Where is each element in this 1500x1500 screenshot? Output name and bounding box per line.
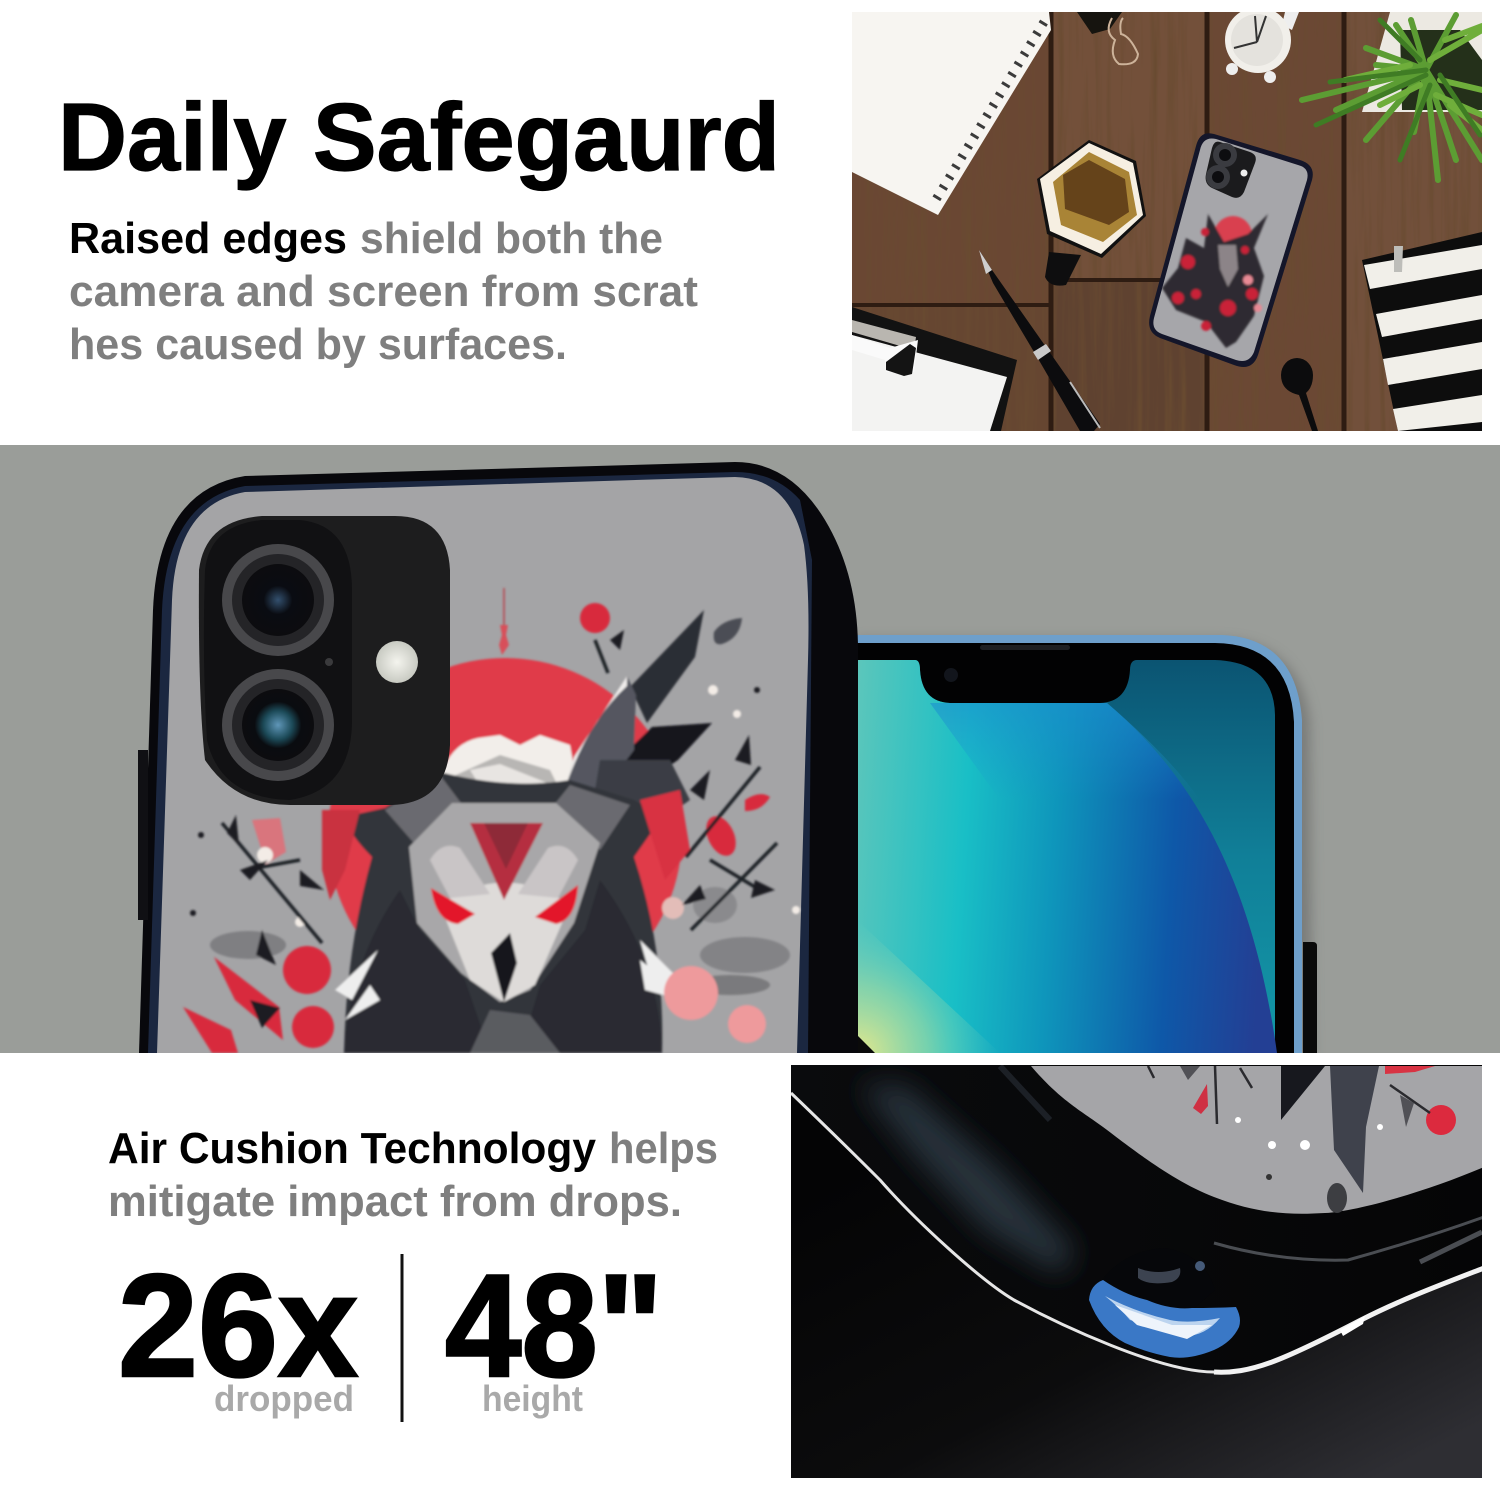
face (409, 803, 600, 1002)
plant (1302, 12, 1482, 180)
flowers and leaves (183, 603, 770, 1053)
notebook (852, 12, 1051, 215)
print on back (1148, 1066, 1456, 1213)
text block: raised edges (69, 214, 698, 369)
flash (376, 641, 418, 683)
text block: air cushion (108, 1124, 718, 1226)
text block: air cushion: Air Cushion Technology (108, 1124, 597, 1173)
owl eyes (431, 888, 475, 924)
text block: raised edges: camera and screen from scrat (69, 267, 698, 316)
title: Daily Safegaurd (58, 84, 780, 191)
bumper reflection lines (1214, 1217, 1484, 1260)
wings (344, 890, 490, 1053)
phone frame (850, 635, 1302, 1053)
text block: air cushion: helps (609, 1124, 718, 1173)
leaf near feather (714, 618, 742, 644)
white edge line (791, 1093, 1214, 1372)
clipboard (852, 307, 1017, 431)
stat: 26x dropped: dropped (214, 1378, 354, 1419)
photo: bumper close-up with water droplet (791, 1065, 1484, 1478)
red sun (328, 656, 681, 933)
right phone (850, 635, 1317, 1060)
clock (1225, 7, 1299, 83)
owl body (344, 772, 662, 1053)
pen (979, 250, 1100, 431)
button (1303, 942, 1317, 1056)
artwork: owl (183, 588, 800, 1053)
stat: 26x dropped: 26x (118, 1244, 358, 1407)
grey foliage (210, 931, 286, 959)
camera module (199, 516, 450, 805)
stat: 48 inches height: height (482, 1378, 583, 1419)
phone case (139, 462, 858, 1053)
beak (491, 933, 517, 1002)
screen (916, 660, 1275, 1040)
small phone (1149, 133, 1313, 367)
water droplet (1089, 1248, 1240, 1358)
notch details (944, 668, 958, 682)
text block: air cushion: mitigate impact from drops. (108, 1177, 682, 1226)
bumper (1157, 1169, 1482, 1370)
binder clip (1077, 12, 1138, 64)
lens bottom (222, 669, 334, 781)
small phone artwork (1162, 214, 1268, 348)
stat: 48 inches height: 48" (445, 1244, 663, 1407)
feathers (630, 610, 704, 723)
text block: raised edges: hes caused by surfaces. (69, 320, 567, 369)
coffee cup (1037, 140, 1146, 286)
small phone camera (1206, 142, 1256, 198)
text block: raised edges: Raised edges (69, 214, 347, 263)
grey back surface (1031, 1066, 1484, 1214)
photo: phone on wooden desk (852, 7, 1482, 431)
panel: grey band with phones (0, 445, 1500, 1060)
lens top (222, 544, 334, 656)
bumper highlight (860, 1085, 1075, 1275)
spoon (1281, 358, 1318, 431)
striped notebook (1362, 232, 1482, 431)
text block: raised edges: shield both the (360, 214, 663, 263)
large phone (138, 462, 858, 1053)
white crest (444, 733, 574, 784)
